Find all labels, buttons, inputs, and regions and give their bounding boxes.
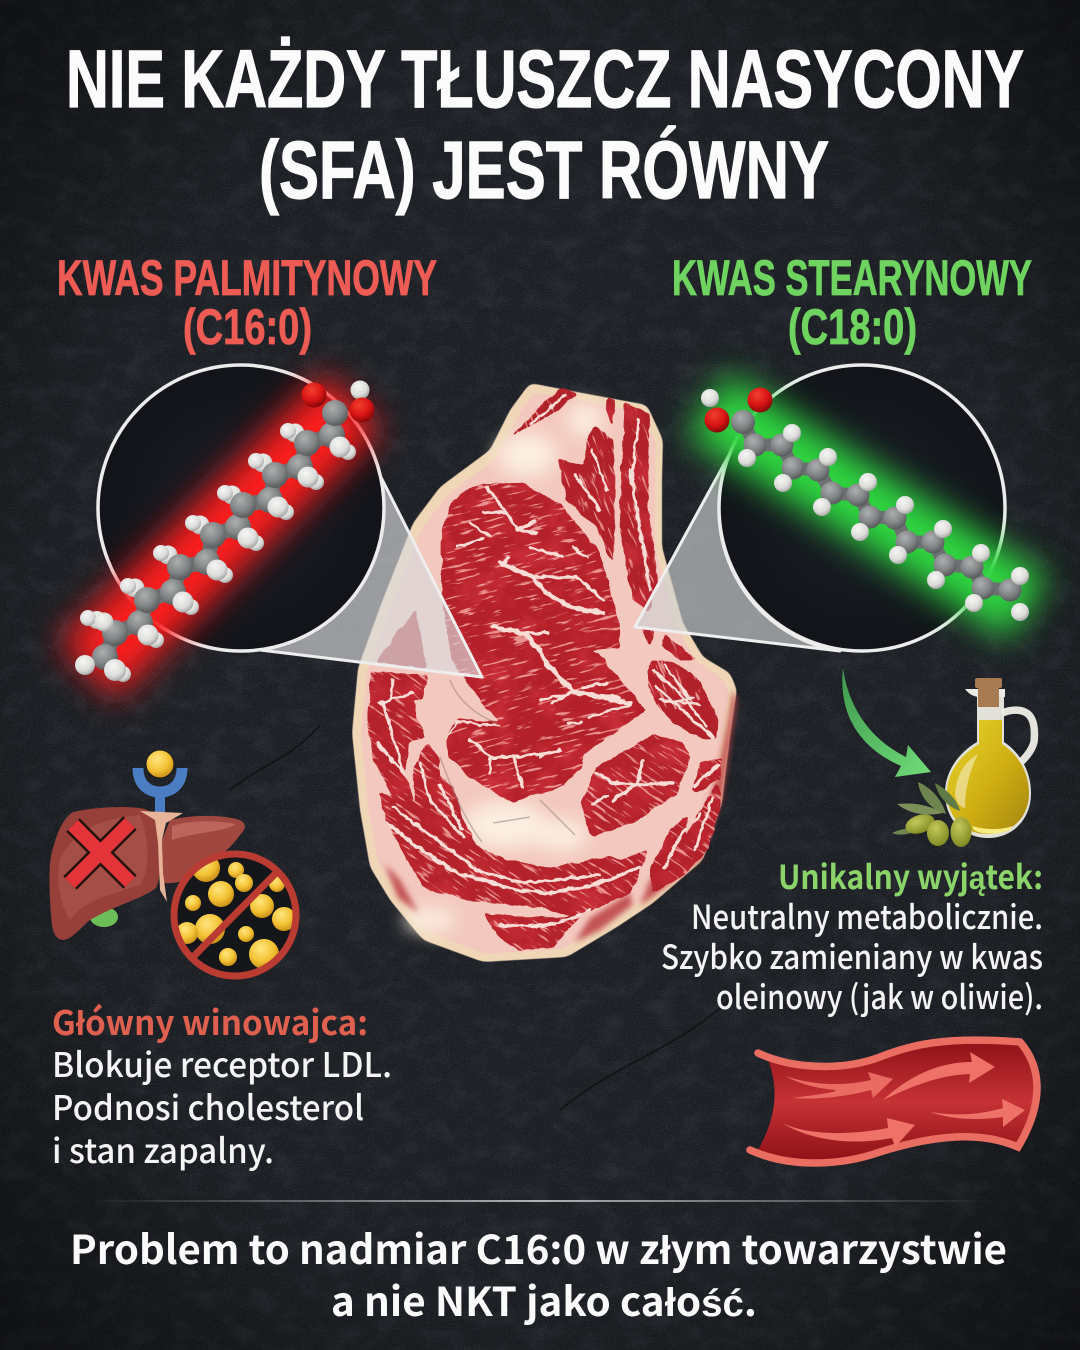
olives <box>903 811 972 847</box>
panel text: main culprit: Podnosi cholesterol <box>52 1081 364 1130</box>
panel text: unique exception: Neutralny metabolicznie. <box>691 891 1043 939</box>
left glow <box>88 402 352 670</box>
heading: stearic acid <box>672 250 1032 355</box>
flow arrows <box>782 1052 1025 1147</box>
icon: liver with receptor and blocked fat <box>49 750 297 977</box>
callout cone: left <box>260 422 482 677</box>
heading: palmitic acid <box>57 250 437 355</box>
heading: palmitic acid: KWAS PALMITYNOWY <box>57 250 437 306</box>
right glow <box>708 405 1028 608</box>
icon: LDL receptor <box>138 750 182 816</box>
magnifier circle: left <box>98 365 384 651</box>
conclusion <box>70 1218 1007 1328</box>
title <box>66 34 1024 216</box>
molecule: stearic acid <box>701 388 1029 621</box>
heading: stearic acid: (C18:0) <box>788 299 917 355</box>
bottle handle <box>1002 710 1034 762</box>
muscle: rib eye <box>440 482 646 802</box>
title: (SFA) JEST RÓWNY <box>259 125 829 216</box>
steak illustration <box>352 384 740 962</box>
spout <box>965 689 1005 697</box>
icon: red X <box>70 823 130 883</box>
conclusion: Problem to nadmiar C16:0 w złym towarzystwie <box>70 1218 1007 1276</box>
muscle: faint left cap <box>377 610 427 668</box>
icon: blood vessel <box>750 1040 1037 1163</box>
red edge patches <box>385 690 737 942</box>
arrow: to olive oil <box>842 668 931 777</box>
panel text: main culprit: Blokuje receptor LDL. <box>52 1038 392 1087</box>
icon: olive oil bottle <box>892 678 1034 847</box>
olive leaves <box>892 782 960 835</box>
panel text: main culprit <box>52 996 392 1173</box>
panel text: unique exception: Unikalny wyjątek: <box>778 851 1043 899</box>
panel text: unique exception <box>661 851 1043 1019</box>
divider <box>90 1200 990 1202</box>
fat highlights <box>404 404 603 932</box>
magnifier circle: right <box>719 365 1005 651</box>
muscle: lower and outer strips <box>367 671 722 951</box>
panel text: unique exception: Szybko zamieniany w kwas <box>661 931 1043 979</box>
heading: palmitic acid: (C16:0) <box>183 299 312 355</box>
conclusion: a nie NKT jako całość. <box>331 1270 757 1328</box>
icon: liver <box>49 807 245 940</box>
callout cone: right <box>635 435 840 651</box>
panel text: unique exception: oleinowy (jak w oliwie). <box>716 971 1043 1019</box>
icon: gallbladder <box>90 907 118 927</box>
panel text: main culprit: i stan zapalny. <box>52 1124 274 1173</box>
icon: crossed-out fat cells <box>173 853 297 977</box>
bottle glass and oil <box>945 695 1031 838</box>
panel text: main culprit: Główny winowajca: <box>52 996 368 1045</box>
muscle: upper right strips <box>514 388 718 740</box>
molecule: palmitic acid <box>75 380 374 682</box>
fat seams <box>440 680 575 842</box>
cork <box>975 678 1002 707</box>
